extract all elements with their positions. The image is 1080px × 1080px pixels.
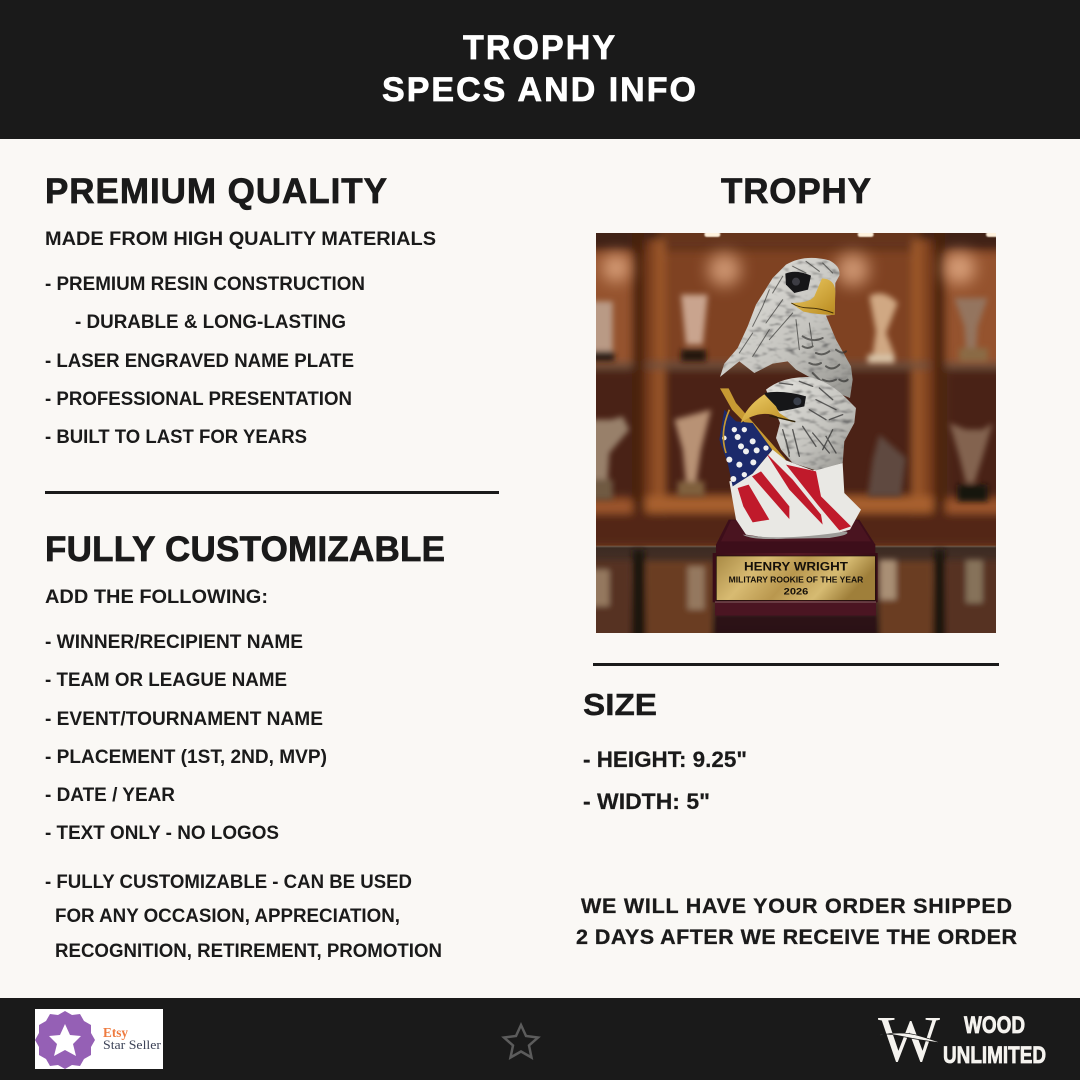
flag pole and finial bbox=[720, 388, 786, 460]
text block: customization list: RECOGNITION, RETIREMENT, PROMOTION bbox=[55, 941, 442, 962]
text block: customization list: - FULLY CUSTOMIZABLE - CAN BE USED bbox=[45, 872, 412, 893]
glass table reflection bbox=[589, 546, 1003, 640]
text block: premium quality list bbox=[45, 229, 436, 448]
heading: premium quality: PREMIUM QUALITY bbox=[45, 172, 387, 211]
blurred background trophies bbox=[589, 293, 993, 501]
heading: trophy: TROPHY bbox=[721, 172, 871, 211]
text block: dimensions: - HEIGHT: 9.25" bbox=[583, 747, 747, 772]
icon: outline star bbox=[504, 1025, 538, 1058]
engraved name plate: HENRY WRIGHT bbox=[744, 560, 848, 573]
header band bbox=[0, 0, 1080, 139]
heading: fully customizable: FULLY CUSTOMIZABLE bbox=[45, 530, 445, 569]
text block: premium quality list: - PREMIUM RESIN CONSTRUCTION bbox=[45, 274, 365, 295]
lower eagle bbox=[741, 377, 856, 470]
text block: customization list: ADD THE FOLLOWING: bbox=[45, 587, 268, 608]
logo wordmark: WOOD bbox=[964, 1012, 1025, 1039]
footer band bbox=[0, 998, 1080, 1080]
header title bbox=[382, 29, 696, 109]
text block: dimensions bbox=[583, 747, 747, 814]
text block: dimensions: - WIDTH: 5" bbox=[583, 789, 710, 814]
text block: customization list: - TEAM OR LEAGUE NAME bbox=[45, 670, 287, 691]
badge: Etsy star seller: Star Seller bbox=[103, 1037, 162, 1052]
trophy photo bbox=[596, 233, 996, 633]
flag stars canton bbox=[719, 410, 772, 486]
text block: customization list: - WINNER/RECIPIENT NAME bbox=[45, 632, 303, 653]
panel: fully customizable bbox=[45, 530, 445, 962]
eagle figurine with flag bbox=[719, 258, 861, 539]
text block: customization list: - PLACEMENT (1ST, 2ND, MVP) bbox=[45, 747, 327, 768]
icon: purple star badge bbox=[35, 1011, 95, 1069]
engraved name plate: MILITARY ROOKIE OF THE YEAR bbox=[729, 575, 863, 585]
badge: Etsy star seller bbox=[35, 1009, 163, 1069]
text block: customization list: - TEXT ONLY - NO LOGOS bbox=[45, 823, 279, 844]
text block: customization list bbox=[45, 587, 442, 962]
panel: premium quality bbox=[45, 172, 436, 448]
engraved name plate bbox=[716, 556, 875, 600]
header title: TROPHY bbox=[463, 29, 615, 67]
text block: customization list: FOR ANY OCCASION, APPRECIATION, bbox=[55, 906, 400, 927]
text block: premium quality list: - LASER ENGRAVED NAME PLATE bbox=[45, 351, 354, 372]
display cabinet background bbox=[596, 233, 996, 633]
ceiling lights bbox=[602, 232, 999, 286]
text block: customization list: - EVENT/TOURNAMENT NAME bbox=[45, 709, 323, 730]
text block: premium quality list: - BUILT TO LAST FOR YEARS bbox=[45, 427, 307, 448]
upper eagle bbox=[720, 258, 853, 398]
text block: premium quality list: - DURABLE & LONG-LASTING bbox=[75, 312, 346, 333]
text block: premium quality list: - PROFESSIONAL PRESENTATION bbox=[45, 389, 352, 410]
header title: SPECS AND INFO bbox=[382, 71, 696, 109]
panel: size bbox=[583, 687, 747, 814]
text block: premium quality list: MADE FROM HIGH QUALITY MATERIALS bbox=[45, 229, 436, 250]
logo: Wood Unlimited bbox=[878, 1003, 1046, 1076]
callout: shipping note: WE WILL HAVE YOUR ORDER SHIPPED bbox=[581, 894, 1012, 918]
callout: shipping note bbox=[576, 894, 1017, 949]
callout: shipping note: 2 DAYS AFTER WE RECEIVE THE ORDER bbox=[576, 925, 1017, 949]
logo mark W: W bbox=[878, 1003, 941, 1076]
logo wordmark bbox=[943, 1012, 1046, 1069]
text block: customization list: - DATE / YEAR bbox=[45, 785, 175, 806]
logo wordmark: UNLIMITED bbox=[943, 1042, 1046, 1069]
trophy base bbox=[713, 520, 878, 633]
draped flag body bbox=[729, 450, 861, 539]
heading: size: SIZE bbox=[583, 687, 657, 722]
engraved name plate: 2026 bbox=[784, 587, 808, 597]
badge: Etsy star seller: Etsy bbox=[103, 1026, 128, 1041]
